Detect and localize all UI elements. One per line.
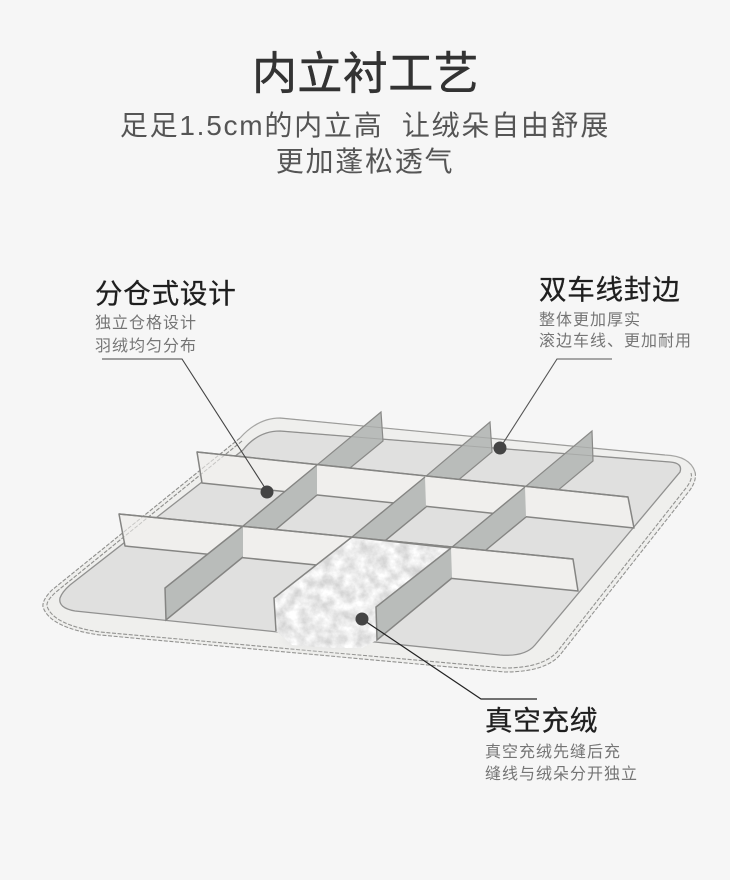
title: 内立衬工艺	[252, 48, 479, 99]
callout heading: 真空充绒	[485, 705, 598, 736]
callout: double seam	[539, 274, 692, 350]
callout: vacuum fill	[485, 705, 638, 783]
outer fabric border	[43, 418, 695, 672]
seam seen through baffles	[52, 418, 670, 592]
stitching: double seam	[43, 438, 695, 672]
callout body: 羽绒均匀分布	[95, 338, 197, 355]
callout body	[539, 311, 692, 350]
callout body: 真空充绒先缝后充	[485, 744, 621, 761]
callout heading: 分仓式设计	[95, 278, 236, 309]
callout: compartment design	[95, 278, 236, 355]
inner tray floor	[60, 431, 681, 655]
back column baffles	[317, 412, 593, 517]
leader line: vacuum fill	[356, 612, 537, 699]
subtitle: 足足1.5cm的内立高 让绒朵自由舒展	[120, 110, 610, 141]
front column baffles	[119, 514, 573, 640]
leader line: compartments	[102, 359, 274, 498]
callout body: 缝线与绒朵分开独立	[485, 766, 638, 783]
leader line: double seam	[494, 359, 612, 454]
callout body	[95, 314, 197, 355]
callout body: 滚边车线、更加耐用	[539, 333, 692, 350]
down filling in the open cell	[274, 537, 451, 649]
callout body	[485, 743, 638, 783]
subtitle	[120, 110, 610, 177]
callout heading: 双车线封边	[539, 274, 680, 305]
callout body: 整体更加厚实	[539, 312, 641, 329]
callout body: 独立仓格设计	[95, 315, 197, 332]
front row baffle	[119, 514, 578, 591]
back row baffle	[197, 452, 634, 528]
subtitle: 更加蓬松透气	[276, 146, 454, 177]
middle column baffles	[197, 452, 628, 578]
